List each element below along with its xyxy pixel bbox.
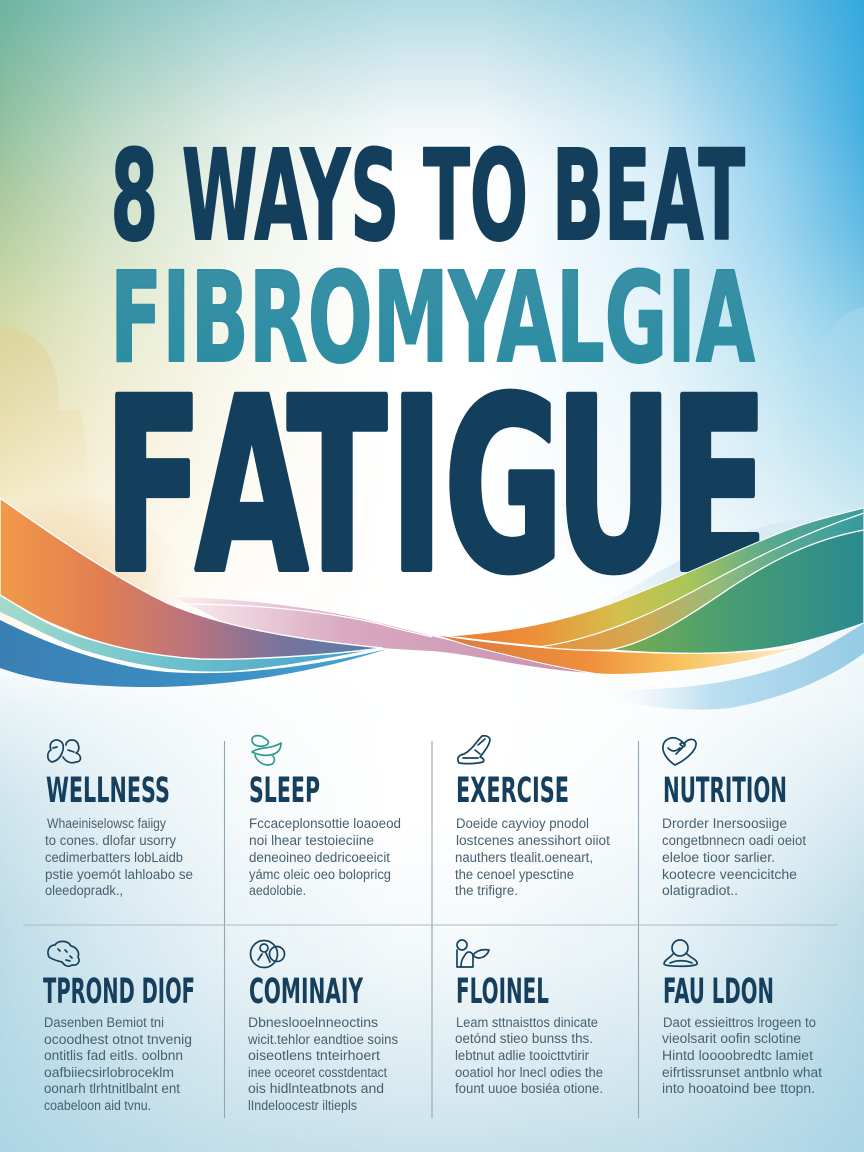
panel: wellness [45, 740, 193, 898]
title line 3: FATIGUE [104, 347, 768, 626]
wave ribbons [0, 498, 864, 710]
left teal band [0, 595, 380, 672]
text: sleep: Fccaceplonsottie loaoeod [249, 816, 401, 831]
text: sleep: deneoineo dedricoeeicit [249, 850, 390, 865]
heading: exercise: EXERCISE [456, 771, 569, 811]
right green band [609, 530, 864, 653]
icon: person meditating [664, 940, 697, 966]
text: exercise: Doeide cayvioy pnodol [456, 816, 589, 831]
background clouds [0, 307, 864, 620]
text: fau ldon [662, 1015, 822, 1096]
text: fau ldon: into hooatoind bee ttopn. [662, 1081, 815, 1096]
right middle band [539, 513, 864, 650]
icon: nutrition [663, 738, 696, 765]
text: exercise: the trifigre. [455, 883, 518, 898]
icon: community circle [250, 940, 284, 968]
text: fau ldon: eifrtissrunset antbnlo what [662, 1065, 822, 1080]
panel: exercise [455, 736, 610, 898]
text: wellness: cedimerbatters lobLaidb [45, 850, 183, 865]
text: nutrition: kootecre veencicitche [662, 867, 797, 882]
right upper rainbow band [448, 508, 864, 650]
pale blue wave behind title [592, 516, 830, 620]
text: cominaiy: ois hidlnteatbnots and [248, 1081, 384, 1096]
grid dividers [23, 741, 838, 1118]
text: cominaiy: inee oceoret cosstdentact [248, 1065, 387, 1080]
text: exercise: lostcenes anessihort oiiot [456, 833, 610, 848]
icon: person and leaf [457, 940, 489, 967]
text: floinel: ooatiol hor lnecl odies the [455, 1065, 603, 1080]
text: cominaiy: oiseotlens tnteirhoert [248, 1048, 380, 1063]
panel: fau ldon [662, 940, 822, 1096]
text: fau ldon: Hintd loooobredtc lamiet [662, 1048, 813, 1063]
text: cominaiy: wicit.tehlor eandtioe soins [247, 1032, 398, 1047]
icon: exercise [458, 736, 490, 764]
text: cominaiy [247, 1015, 398, 1113]
text: floinel [455, 1015, 603, 1096]
title [104, 124, 768, 626]
text: floinel: Leam sttnaisttos dinicate [456, 1015, 598, 1030]
left blue band [0, 620, 387, 687]
text: sleep: aedolobie. [249, 883, 306, 898]
heading: wellness: WELLNESS [46, 771, 170, 811]
text: nutrition: Drorder Inersoosiige [662, 816, 787, 831]
text: floinel: fount uuoe bosiéa otione. [455, 1081, 603, 1096]
heading: cominaiy: COMINAIY [249, 972, 363, 1012]
text: floinel: lebtnut adlie tooicttvtirir [455, 1048, 589, 1063]
text: wellness: to cones. dlofar usorry [45, 833, 176, 848]
text: sleep: yámc oleic oeo bolopricg [249, 867, 391, 882]
text: sleep [249, 816, 401, 898]
icon: sleep [252, 736, 281, 765]
panel: cominaiy [247, 940, 398, 1113]
panel: nutrition [662, 738, 806, 898]
text: exercise: the cenoel ypesctine [455, 867, 574, 882]
heading: floinel: FLOINEL [456, 972, 549, 1012]
text: floinel: oetónd stieo bunss ths. [455, 1031, 593, 1046]
text: fau ldon: vieolsarit oofin sclotine [662, 1031, 801, 1046]
left pink ribbon [173, 597, 592, 673]
lower right pale blue wave [615, 623, 864, 710]
text: wellness: pstie yoemót lahloabo se [45, 867, 193, 882]
heading: sleep: SLEEP [249, 771, 320, 811]
text: tprond diof: coabeloon aid tvnu. [44, 1098, 151, 1113]
text: nutrition: eleloe tioor sarlier. [662, 850, 775, 865]
text: wellness [45, 816, 193, 898]
icon: cloud head [48, 941, 79, 966]
text: tprond diof: Dasenben Bemiot tni [44, 1015, 164, 1030]
text: nutrition [662, 816, 806, 898]
text: wellness: Whaeiniselowsc faiigy [47, 816, 166, 831]
panel: floinel [455, 940, 603, 1096]
text: tprond diof: ocoodhest otnot tnvenig [44, 1032, 192, 1047]
text: tprond diof: ontitlis fad eitls. oolbnn [44, 1048, 183, 1063]
text: exercise [455, 816, 610, 898]
text: tprond diof [44, 1015, 192, 1113]
left orange band [0, 498, 383, 659]
text: wellness: oleedopradk., [45, 883, 123, 898]
text: nutrition: congetbnnecn oadi oeiot [662, 833, 806, 848]
right lower orange band [432, 634, 809, 674]
text: tprond diof: oafbiiecsirlobroceklm [44, 1065, 174, 1080]
text: nutrition: olatigradiot.. [662, 883, 738, 898]
text: cominaiy: lIndeloocestr iltiepls [248, 1098, 357, 1113]
panel: sleep [249, 736, 401, 898]
heading: tprond diof: TPROND DIOF [43, 972, 195, 1012]
text: fau ldon: Daot essieittros lrogeen to [663, 1015, 816, 1030]
text: sleep: noi lhear testoieciine [249, 833, 374, 848]
panel: trpond diof [43, 941, 195, 1113]
heading: fau ldon: FAU LDON [663, 972, 774, 1012]
text: exercise: nauthers tlealit.oeneart, [455, 850, 593, 865]
text: tprond diof: oonarh tlrhtnitlbalnt ent [44, 1081, 180, 1096]
icon: wellness [48, 740, 80, 763]
text: cominaiy: Dbneslooelnneoctins [248, 1015, 378, 1030]
